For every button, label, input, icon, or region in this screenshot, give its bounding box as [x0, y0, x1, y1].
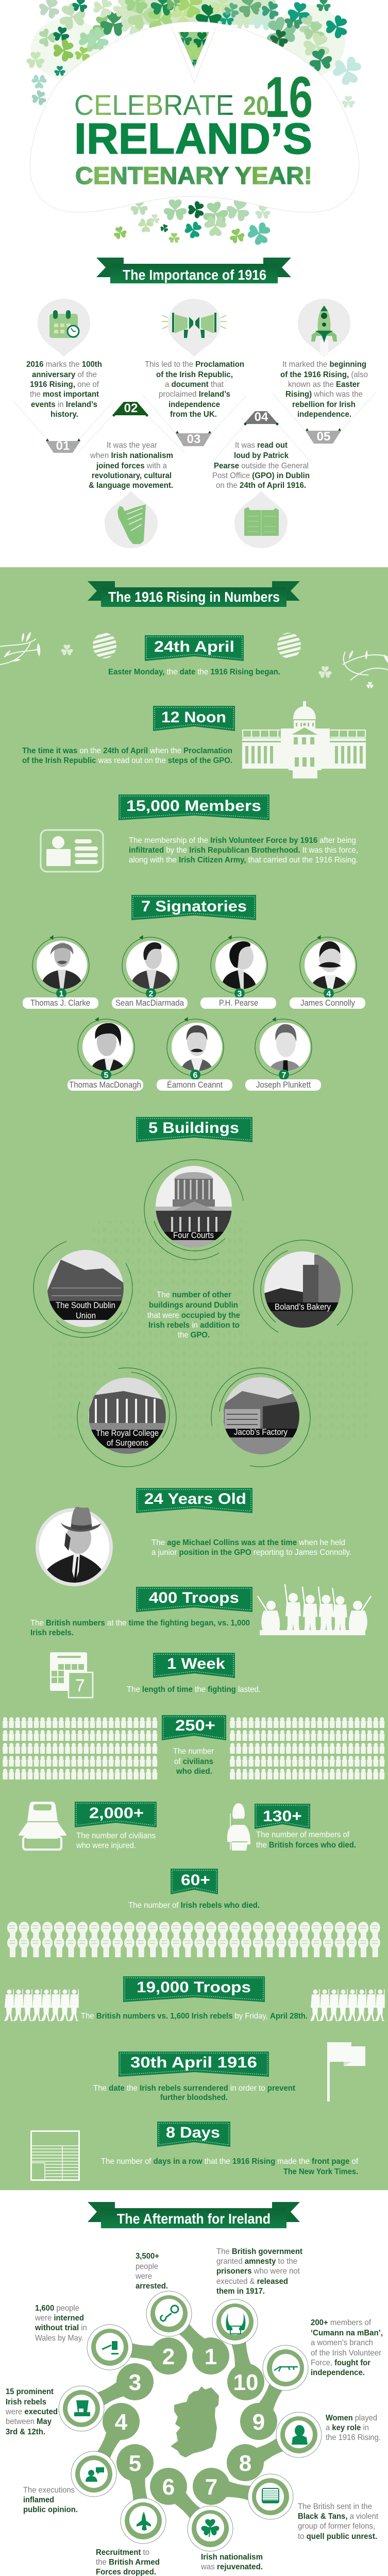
- badge: 24th April: 24th April: [154, 638, 234, 655]
- icon: newspaper: [31, 2131, 79, 2180]
- icon: right egg: [277, 633, 301, 658]
- icon: soldiers: [258, 1584, 371, 1635]
- text: 30th April 1916: [93, 2084, 296, 2102]
- text: executed: 15 prominent: [6, 2387, 54, 2396]
- number 1: [56, 988, 66, 998]
- map: Ireland: [171, 2386, 219, 2458]
- badge: 24th April: [145, 635, 244, 661]
- panel: fact 03: [145, 299, 244, 446]
- icon: handcuffs: [146, 2291, 192, 2336]
- icon: harp: [105, 490, 158, 548]
- badge: 250+: 250+: [175, 1717, 215, 1734]
- text: 130+: the British forces who died.: [256, 1841, 356, 1850]
- name pill: Thomas MacDonagh: [69, 1080, 141, 1090]
- badge: 2,000+: 2,000+: [89, 1805, 144, 1822]
- text: interned: 1,600 people: [35, 2304, 79, 2313]
- icon: proclamation document: [234, 490, 288, 548]
- text: 5 Buildings: the GPO.: [178, 1331, 210, 1340]
- step 10: [222, 2319, 266, 2402]
- text: 130+: The number of members of: [256, 1831, 350, 1839]
- text: arrested: people: [136, 2262, 158, 2271]
- chart: aftermath numbered chain: [76, 2304, 305, 2538]
- name pill: [200, 997, 276, 1009]
- text: women: a key role in: [326, 2424, 369, 2432]
- badge: 8 Days: [157, 2122, 230, 2147]
- portrait: Éamonn Ceannt: [167, 1017, 224, 1076]
- text: Cumann na mBan: ‘Cumann na mBan’,: [311, 2329, 383, 2337]
- text: 19,000 Troops: The British numbers vs. 1,600 Irish rebels by Friday, April 28th.: [81, 2012, 308, 2021]
- panel: signatory 4: [290, 935, 365, 1009]
- badge: 30th April 1916: 30th April 1916: [130, 2054, 257, 2071]
- text: public opinion: [23, 2486, 78, 2514]
- pictogram: troops right: [310, 1989, 385, 2021]
- text: Cumann na mBan: [311, 2318, 383, 2377]
- number 3: 3: [238, 990, 242, 998]
- portrait: Thomas J. Clarke: [32, 935, 89, 994]
- text: 2,000+: who were injured.: [76, 1841, 136, 1850]
- text: nationalism: was rejuvenated.: [200, 2563, 263, 2571]
- panel: signatory 6: [157, 1017, 232, 1091]
- icon: rocket: [298, 299, 350, 357]
- ribbon heading: numbers: [88, 581, 300, 607]
- text: Cumann na mBan: a women’s branch: [311, 2338, 373, 2347]
- name pill: Joseph Plunkett: [256, 1080, 311, 1090]
- label: 01: [46, 438, 80, 453]
- badge: 130+: 130+: [263, 1808, 302, 1825]
- step 1: [160, 2304, 231, 2376]
- step 4: 4: [115, 2410, 128, 2435]
- pictogram: troops left: [4, 1989, 79, 2021]
- text: 15,000 Members: [129, 836, 358, 865]
- number 2: [146, 988, 156, 998]
- text: 2,000+: [76, 1832, 156, 1850]
- icon: shamrock: [188, 2506, 233, 2551]
- text: 400 Troops: Irish rebels.: [30, 1629, 74, 1637]
- step 9: 9: [252, 2410, 265, 2435]
- label: 01: 01: [56, 439, 70, 453]
- badge: 15,000 Members: [119, 794, 269, 820]
- text: fact 02: joined forces with a: [96, 462, 167, 470]
- number 3: [234, 988, 245, 998]
- panel: Jacob's Factory: Jacob’s Factory: [234, 1427, 288, 1437]
- text: nationalism: Irish nationalism: [201, 2553, 263, 2562]
- panel: Royal College of Surgeons: [77, 1367, 177, 1467]
- panel: fact 05: [280, 299, 368, 444]
- text: fact 05: It marked the beginning: [282, 360, 366, 369]
- text: interned: were interned: [35, 2314, 84, 2323]
- text: 60+: The number of Irish rebels who died.: [128, 1901, 260, 1910]
- text: public opinion: The executions: [23, 2486, 75, 2495]
- badge: 5 Buildings: [136, 1117, 252, 1142]
- text: arrested: [135, 2252, 168, 2291]
- portrait: Michael Collins: [36, 1506, 113, 1587]
- text: fact 01: [26, 360, 102, 419]
- badge: 24 Years Old: [136, 1488, 252, 1513]
- name pill: Sean MacDiarmada: [115, 998, 184, 1008]
- portrait: Thomas MacDonagh: [78, 1017, 134, 1076]
- ribbon heading: importance: The Importance of 1916: [123, 267, 266, 283]
- text: women: the 1916 Rising.: [326, 2433, 381, 2442]
- text: interned: without trial in: [35, 2324, 87, 2332]
- step 6: 6: [162, 2475, 175, 2500]
- text: 30th April 1916: further bloodshed.: [160, 2093, 228, 2102]
- text: 8 Days: [101, 2157, 359, 2176]
- text: fact 02: & language movement.: [89, 481, 173, 490]
- text: fact 05: Rising) which was the: [285, 390, 363, 399]
- icon: left egg: [93, 633, 116, 658]
- text: Black and Tans: to quell public unrest.: [298, 2532, 377, 2541]
- text: Black and Tans: The British sent in the: [298, 2502, 372, 2511]
- name pill: Thomas J. Clarke: [30, 998, 90, 1008]
- number 4: 4: [327, 990, 331, 998]
- panel: South Dublin Union: The South Dublin: [56, 1300, 115, 1310]
- text: fact 02: It was the year: [107, 441, 158, 450]
- badge: 24 Years Old: 24 Years Old: [144, 1490, 246, 1507]
- text: executed: [5, 2387, 58, 2436]
- text: recruitment: [96, 2548, 160, 2576]
- text: recruitment: the British Armed: [96, 2558, 160, 2567]
- decoration: small right flower: [318, 666, 332, 679]
- pictogram: civilians left: [3, 1717, 157, 1780]
- badge: 1 Week: [153, 1653, 235, 1678]
- panel: Boland's Bakery: [253, 1240, 353, 1332]
- text: 8 Days: The number of days in a row that the 1916 Rising made the front page of: [101, 2157, 359, 2166]
- icon: white flag: [327, 2042, 365, 2102]
- number 7: 7: [282, 1071, 286, 1080]
- panel: Royal College of Surgeons: The Royal College: [96, 1428, 159, 1438]
- text: arrested: 3,500+: [136, 2252, 159, 2261]
- badge: 19,000 Troops: [123, 1976, 265, 2002]
- panel: fact 04: [212, 410, 310, 548]
- text: amnesty: them in 1917.: [216, 2287, 265, 2296]
- number 5: 5: [104, 1071, 109, 1080]
- text: 5 Buildings: that were occupied by the: [147, 1311, 240, 1320]
- badge: 15,000 Members: 15,000 Members: [126, 798, 261, 815]
- label: 02: 02: [124, 401, 138, 415]
- badge: 60+: [171, 1869, 218, 1894]
- badge: 250+: [162, 1715, 226, 1740]
- text: executed: between May: [6, 2417, 52, 2426]
- number 5: [101, 1070, 111, 1080]
- panel: fact 01: [26, 299, 102, 453]
- text: fact 04: on the 24th of April 1916.: [216, 481, 306, 490]
- text: fact 03: This led to the Proclamation: [145, 360, 244, 369]
- pictogram: raised fists: [7, 1922, 380, 1957]
- text: 5 Buildings: The number of other: [157, 1291, 231, 1299]
- title text: 16: [265, 65, 313, 129]
- icon: open hands: [212, 2299, 258, 2345]
- text: fact 01: history.: [50, 410, 78, 419]
- text: fact 03: independence: [168, 400, 220, 409]
- icon: leprechaun hat: [59, 2386, 104, 2431]
- ribbon heading: aftermath: The Aftermath for Ireland: [117, 2211, 271, 2227]
- text: arrested: arrested.: [136, 2282, 168, 2291]
- step 9: [239, 2362, 297, 2442]
- title notch triangle: [172, 27, 216, 82]
- icon: calendar seven: 7: [75, 1676, 85, 1696]
- step 7: [191, 2466, 273, 2510]
- text: fact 02: revolutionary, cultural: [92, 471, 172, 480]
- step 7: 7: [205, 2475, 217, 2500]
- text: fact 03: from the UK.: [170, 410, 217, 419]
- title text: IRELAND’S: [74, 114, 312, 163]
- text: 24 Years Old: [151, 1538, 351, 1557]
- badge: 400 Troops: 400 Troops: [149, 1589, 239, 1606]
- icon: woman: [276, 2412, 322, 2458]
- icon: British guard: [227, 1803, 250, 1851]
- icon: rifle: [263, 2345, 308, 2391]
- text: fact 02: [89, 441, 173, 490]
- step 8: [225, 2423, 305, 2483]
- text: fact 04: It was read out: [235, 441, 288, 450]
- step 8: 8: [239, 2451, 251, 2476]
- panel: South Dublin Union: [33, 1241, 133, 1338]
- step 1: 1: [205, 2344, 217, 2369]
- badge: 1 Week: 1 Week: [167, 1655, 225, 1672]
- text: fact 03: proclaimed Ireland’s: [159, 390, 230, 399]
- step 2: 2: [162, 2344, 175, 2369]
- text: fact 04: Pearse outside the General: [214, 462, 309, 470]
- diamond connector lines: [12, 392, 376, 464]
- badge: 60+: 60+: [181, 1872, 210, 1889]
- text: amnesty: prisoners who were not: [216, 2267, 300, 2276]
- text: executed: 3rd & 12th.: [6, 2428, 45, 2436]
- number 2: 2: [149, 990, 154, 998]
- badge: 400 Troops: [136, 1587, 252, 1612]
- icon: GPO building: [242, 701, 366, 778]
- text: 250+: [173, 1747, 214, 1776]
- label: 02: [112, 401, 148, 416]
- text: 15,000 Members: The membership of the Irish Volunteer Force by 1916 after being: [129, 836, 356, 845]
- step 3: 3: [129, 2370, 141, 2395]
- panel: signatory 1: [23, 935, 98, 1009]
- decoration: right floral swirl: [343, 650, 388, 688]
- text: executed: Irish rebels: [6, 2398, 46, 2406]
- title text: [74, 65, 313, 189]
- text: 12 Noon: The time it was on the 24th of April when the Proclamation: [22, 747, 232, 755]
- step 4: [82, 2401, 141, 2480]
- number 6: [190, 1070, 200, 1080]
- portrait: P.H. Pearse: [211, 935, 267, 994]
- text: 130+: [256, 1831, 356, 1850]
- icon: megaphones: [162, 299, 227, 357]
- title shield shape: [30, 22, 359, 212]
- text: fact 05: independence.: [297, 410, 351, 419]
- number 6: 6: [193, 1071, 198, 1080]
- portrait: Sean MacDiarmada: [122, 935, 179, 994]
- icon: bed: [248, 2474, 293, 2519]
- text: 2,000+: The number of civilians: [76, 1832, 156, 1840]
- text: Cumann na mBan: of the Irish Volunteer: [311, 2349, 382, 2358]
- text: amnesty: The British government: [216, 2247, 303, 2256]
- panel: Jacob's Factory: [211, 1367, 311, 1467]
- badge: 12 Noon: 12 Noon: [161, 709, 226, 726]
- badge: 5 Buildings: 5 Buildings: [148, 1120, 239, 1137]
- decoration: left floral swirl: [0, 631, 41, 665]
- text: Black and Tans: Black & Tans, a violent: [298, 2512, 379, 2521]
- step 10: 10: [233, 2370, 258, 2395]
- panel: South Dublin Union: Union: [76, 1311, 96, 1320]
- title text: 20: [243, 91, 269, 121]
- text: Cumann na mBan: independence.: [311, 2368, 365, 2377]
- text: 8 Days: The New York Times.: [283, 2167, 358, 2176]
- text: fact 04: [212, 441, 310, 490]
- text: amnesty: granted amnesty to the: [216, 2257, 297, 2266]
- panel: signatory 5: [68, 1017, 143, 1091]
- name pill: James Connolly: [300, 998, 355, 1008]
- text: fact 04: loud by Patrick: [234, 451, 289, 460]
- text: Black and Tans: group of former felons,: [298, 2522, 375, 2531]
- text: 12 Noon: [22, 747, 232, 765]
- step 6: [148, 2466, 220, 2538]
- badge: 2,000+: [75, 1802, 157, 1827]
- icon: speaking person: [71, 2451, 116, 2497]
- label: 03: [176, 431, 211, 446]
- text: fact 01: the most important: [30, 390, 99, 399]
- badge: 12 Noon: [153, 706, 235, 731]
- text: fact 05: [280, 360, 368, 419]
- text: fact 02: when Irish nationalism: [90, 451, 173, 460]
- portrait: Joseph Plunkett: [255, 1017, 312, 1076]
- step 5: 5: [129, 2451, 141, 2476]
- text: amnesty: [216, 2247, 303, 2296]
- text: 24 Years Old: a junior position in the GPO reporting to James Connolly.: [151, 1548, 351, 1557]
- text: 24 Years Old: The age Michael Collins was at the time when he held: [151, 1538, 345, 1547]
- text: 5 Buildings: buildings around Dublin: [149, 1301, 238, 1310]
- text: women: Women played: [326, 2414, 377, 2422]
- panel: Boland's Bakery: Boland’s Bakery: [275, 1302, 331, 1312]
- text: executed: were executed: [5, 2408, 58, 2416]
- icon: membership card: [41, 830, 103, 872]
- label: 05: 05: [317, 430, 330, 444]
- text: 400 Troops: The British numbers at the time the fighting began, vs. 1,000: [30, 1619, 250, 1628]
- text: 250+: who died.: [176, 1767, 212, 1776]
- badge: 130+: [255, 1804, 310, 1829]
- text: fact 01: anniversary of the: [32, 370, 97, 379]
- panel: signatory 3: [200, 935, 276, 1009]
- text: interned: Wales by May.: [35, 2334, 83, 2343]
- text: 5 Buildings: Irish rebels in addition to: [148, 1321, 240, 1330]
- icon: jet: [121, 2498, 166, 2544]
- text: 24th April: Easter Monday, the date the 1916 Rising began.: [108, 668, 280, 676]
- text: nationalism: [200, 2553, 263, 2571]
- text: 250+: of civilians: [174, 1757, 213, 1766]
- badge: 7 Signatories: [131, 895, 256, 920]
- badge: 30th April 1916: [119, 2052, 269, 2077]
- text: Cumann na mBan: Force, fought for: [311, 2359, 370, 2367]
- badge: 7 Signatories: 7 Signatories: [141, 898, 247, 915]
- text: interned: [35, 2304, 87, 2343]
- text: Black and Tans: [298, 2502, 379, 2541]
- panel: Four Courts: Four Courts: [173, 1230, 214, 1240]
- text: fact 01: 2016 marks the 100th: [26, 360, 102, 369]
- text: public opinion: inflamed: [23, 2496, 54, 2504]
- name pill: P.H. Pearse: [219, 998, 258, 1008]
- text: 400 Troops: [30, 1619, 250, 1637]
- name pill: Éamonn Ceannt: [167, 1080, 223, 1090]
- portrait: James Connolly: [300, 935, 357, 994]
- text: 250+: The number: [173, 1747, 214, 1756]
- title text: CENTENARY YEAR!: [75, 162, 312, 189]
- step 5: [115, 2443, 157, 2523]
- text: 15,000 Members: infiltrated by the Irish Republican Brotherhood. It was this force,: [129, 846, 358, 855]
- number 7: [279, 1070, 289, 1080]
- pictogram: civilians right: [230, 1717, 384, 1780]
- text: 15,000 Members: along with the Irish Citizen Army, that carried out the 1916 Rising.: [129, 856, 358, 865]
- text: recruitment: Recruitment to: [96, 2548, 149, 2557]
- text: fact 01: 1916 Rising, one of: [30, 380, 99, 389]
- text: 1 Week: The length of time the fighting lasted.: [127, 1685, 261, 1694]
- panel: fact 02: [89, 401, 173, 548]
- ribbon heading: aftermath: [88, 2202, 300, 2228]
- text: fact 05: known as the Easter: [288, 380, 360, 389]
- text: fact 03: [145, 360, 244, 419]
- text: 12 Noon: of the Irish Republic was read out on the steps of the GPO.: [22, 756, 232, 765]
- panel: Royal College of Surgeons: of Surgeons: [107, 1438, 148, 1448]
- text: fact 01: events in Ireland’s: [31, 400, 97, 409]
- text: fact 05: of the 1916 Rising, (also: [280, 370, 368, 379]
- panel: Four Courts: [144, 1159, 244, 1260]
- label: 03: 03: [187, 432, 200, 446]
- panel: signatory 7: [245, 1017, 321, 1091]
- text: arrested: were: [135, 2272, 152, 2281]
- label: 04: 04: [255, 410, 268, 424]
- shamrock cluster top: [26, 0, 368, 108]
- text: fact 03: of the Irish Republic,: [156, 370, 233, 379]
- shamrock cluster bottom: [112, 196, 276, 250]
- label: 05: [306, 428, 341, 444]
- icon: stretcher bag: [19, 1802, 66, 1850]
- text: public opinion: public opinion.: [23, 2505, 78, 2514]
- badge: 8 Days: 8 Days: [166, 2124, 220, 2141]
- text: fact 03: a document that: [165, 380, 224, 389]
- text: amnesty: executed & released: [216, 2277, 288, 2286]
- text: Cumann na mBan: 200+ members of: [311, 2318, 372, 2327]
- step 2: [108, 2334, 189, 2376]
- number 1: 1: [59, 990, 64, 998]
- number 4: [324, 988, 334, 998]
- panel: signatory 2: [112, 935, 188, 1009]
- icon: gavel: [87, 2325, 132, 2370]
- ribbon heading: numbers: The 1916 Rising in Numbers: [108, 589, 280, 605]
- text: fact 04: Post Office (GPO) in Dublin: [212, 471, 310, 480]
- title text: CELEBRATE: [74, 89, 234, 121]
- decoration: small left flower: [60, 645, 74, 656]
- label: 04: [244, 410, 278, 426]
- text: 30th April 1916: The date the Irish rebels surrendered in order to prevent: [93, 2084, 296, 2093]
- text: fact 05: rebellion for Irish: [292, 400, 356, 409]
- text: 5 Buildings: [147, 1291, 240, 1340]
- ribbon heading: importance: [96, 258, 291, 283]
- panel: rising in numbers background: [0, 567, 388, 2190]
- step 3: [76, 2362, 155, 2420]
- text: women: [326, 2414, 381, 2442]
- badge: 19,000 Troops: 19,000 Troops: [137, 1979, 251, 1996]
- icon: calendar clock: [38, 299, 90, 357]
- icon: calendar seven: [50, 1652, 93, 1698]
